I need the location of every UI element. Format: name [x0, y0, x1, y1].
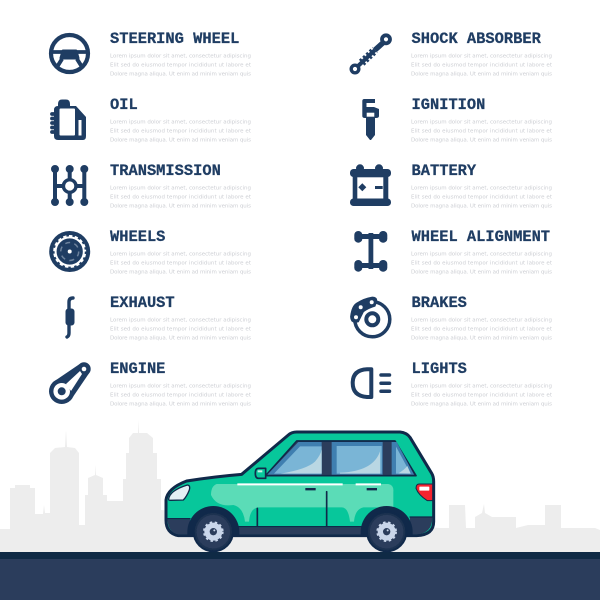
description: Elit sed do eiusmod tempor incididunt ut labore et	[411, 62, 553, 68]
description: Elit sed do eiusmod tempor incididunt ut labore et	[110, 62, 252, 68]
windows	[267, 442, 414, 475]
description: Elit sed do eiusmod tempor incididunt ut labore et	[110, 260, 252, 266]
icon: gear shift	[52, 166, 88, 206]
item: engine	[49, 360, 252, 408]
taillight	[416, 484, 433, 501]
icon: wheel	[49, 231, 90, 272]
description	[110, 54, 252, 78]
window frame	[266, 441, 416, 476]
description: Lorem ipsum dolor sit amet, consectetur adipiscing	[411, 318, 552, 324]
item: wheels	[49, 228, 252, 276]
heading: SHOCK ABSORBER	[412, 30, 542, 48]
item: battery	[350, 162, 553, 210]
description: Dolore magna aliqua. Ut enim ad minim veniam quis	[411, 138, 552, 144]
heading: ENGINE	[110, 360, 165, 378]
description: Lorem ipsum dolor sit amet, consectetur adipiscing	[411, 54, 552, 60]
heading: WHEELS	[110, 228, 165, 246]
heading: BATTERY	[412, 162, 477, 180]
front wheel	[187, 506, 239, 552]
icon: exhaust pipe	[66, 298, 74, 337]
icon: oil jug	[52, 100, 86, 140]
icon: axle	[354, 231, 387, 272]
icon: key	[362, 99, 379, 140]
icon: steering wheel	[51, 35, 88, 72]
description: Dolore magna aliqua. Ut enim ad minim veniam quis	[411, 72, 552, 78]
description	[110, 186, 252, 210]
description	[411, 186, 553, 210]
description	[110, 384, 252, 408]
item: wheel alignment	[354, 228, 553, 276]
trim stripes	[237, 483, 381, 485]
description: Lorem ipsum dolor sit amet, consectetur adipiscing	[411, 186, 552, 192]
heading: EXHAUST	[110, 294, 175, 312]
door handles	[305, 488, 377, 490]
description: Elit sed do eiusmod tempor incididunt ut labore et	[411, 260, 553, 266]
description	[110, 120, 252, 144]
description: Dolore magna aliqua. Ut enim ad minim veniam quis	[110, 402, 251, 408]
headlight	[169, 485, 190, 500]
description	[411, 54, 553, 78]
description: Dolore magna aliqua. Ut enim ad minim veniam quis	[110, 138, 251, 144]
item: brakes	[351, 294, 553, 342]
item: exhaust	[66, 294, 252, 342]
mirror	[255, 468, 266, 478]
item: transmission	[52, 162, 252, 210]
icon: brake disc	[351, 297, 390, 337]
heading: IGNITION	[412, 96, 485, 114]
description: Dolore magna aliqua. Ut enim ad minim veniam quis	[110, 270, 251, 276]
description: Lorem ipsum dolor sit amet, consectetur adipiscing	[411, 252, 552, 258]
description: Dolore magna aliqua. Ut enim ad minim veniam quis	[411, 336, 552, 342]
description: Dolore magna aliqua. Ut enim ad minim veniam quis	[110, 72, 251, 78]
icon: headlight	[353, 369, 390, 397]
description: Lorem ipsum dolor sit amet, consectetur adipiscing	[110, 318, 251, 324]
icon: shock absorber	[351, 35, 390, 73]
item: shock absorber	[351, 30, 553, 78]
description: Dolore magna aliqua. Ut enim ad minim veniam quis	[411, 204, 552, 210]
description: Lorem ipsum dolor sit amet, consectetur adipiscing	[411, 120, 552, 126]
door lines	[257, 492, 327, 526]
icon: timing belt	[49, 362, 91, 404]
heading: WHEEL ALIGNMENT	[412, 228, 550, 246]
description: Elit sed do eiusmod tempor incididunt ut labore et	[411, 392, 553, 398]
heading: BRAKES	[412, 294, 467, 312]
body highlight	[211, 484, 393, 522]
description: Elit sed do eiusmod tempor incididunt ut labore et	[411, 326, 553, 332]
heading: LIGHTS	[412, 360, 467, 378]
item: lights	[353, 360, 553, 408]
item: steering wheel	[51, 30, 252, 78]
heading: STEERING WHEEL	[110, 30, 239, 48]
description: Elit sed do eiusmod tempor incididunt ut labore et	[110, 326, 252, 332]
heading: TRANSMISSION	[110, 162, 221, 180]
description	[411, 120, 553, 144]
description	[411, 252, 553, 276]
description: Lorem ipsum dolor sit amet, consectetur adipiscing	[411, 384, 552, 390]
car body	[166, 432, 434, 536]
city skyline	[0, 420, 600, 552]
description	[110, 252, 252, 276]
description	[411, 384, 553, 408]
item: ignition	[362, 96, 553, 144]
heading: OIL	[110, 96, 138, 114]
item: oil	[52, 96, 252, 144]
description: Dolore magna aliqua. Ut enim ad minim veniam quis	[411, 270, 552, 276]
description: Dolore magna aliqua. Ut enim ad minim veniam quis	[110, 336, 251, 342]
description	[411, 318, 553, 342]
description: Elit sed do eiusmod tempor incididunt ut labore et	[411, 194, 553, 200]
description: Lorem ipsum dolor sit amet, consectetur adipiscing	[110, 120, 251, 126]
description: Lorem ipsum dolor sit amet, consectetur adipiscing	[110, 186, 251, 192]
description	[110, 318, 252, 342]
icon: battery	[350, 164, 391, 206]
description: Lorem ipsum dolor sit amet, consectetur adipiscing	[110, 252, 251, 258]
description: Elit sed do eiusmod tempor incididunt ut labore et	[110, 128, 252, 134]
description: Lorem ipsum dolor sit amet, consectetur adipiscing	[110, 384, 251, 390]
description: Dolore magna aliqua. Ut enim ad minim veniam quis	[110, 204, 251, 210]
description: Dolore magna aliqua. Ut enim ad minim veniam quis	[411, 402, 552, 408]
description: Elit sed do eiusmod tempor incididunt ut labore et	[110, 392, 252, 398]
description: Elit sed do eiusmod tempor incididunt ut labore et	[411, 128, 553, 134]
car	[166, 432, 434, 552]
road	[0, 552, 600, 600]
description: Lorem ipsum dolor sit amet, consectetur adipiscing	[110, 54, 251, 60]
description: Elit sed do eiusmod tempor incididunt ut labore et	[110, 194, 252, 200]
rear wheel	[361, 506, 413, 552]
lower trim	[167, 517, 432, 534]
